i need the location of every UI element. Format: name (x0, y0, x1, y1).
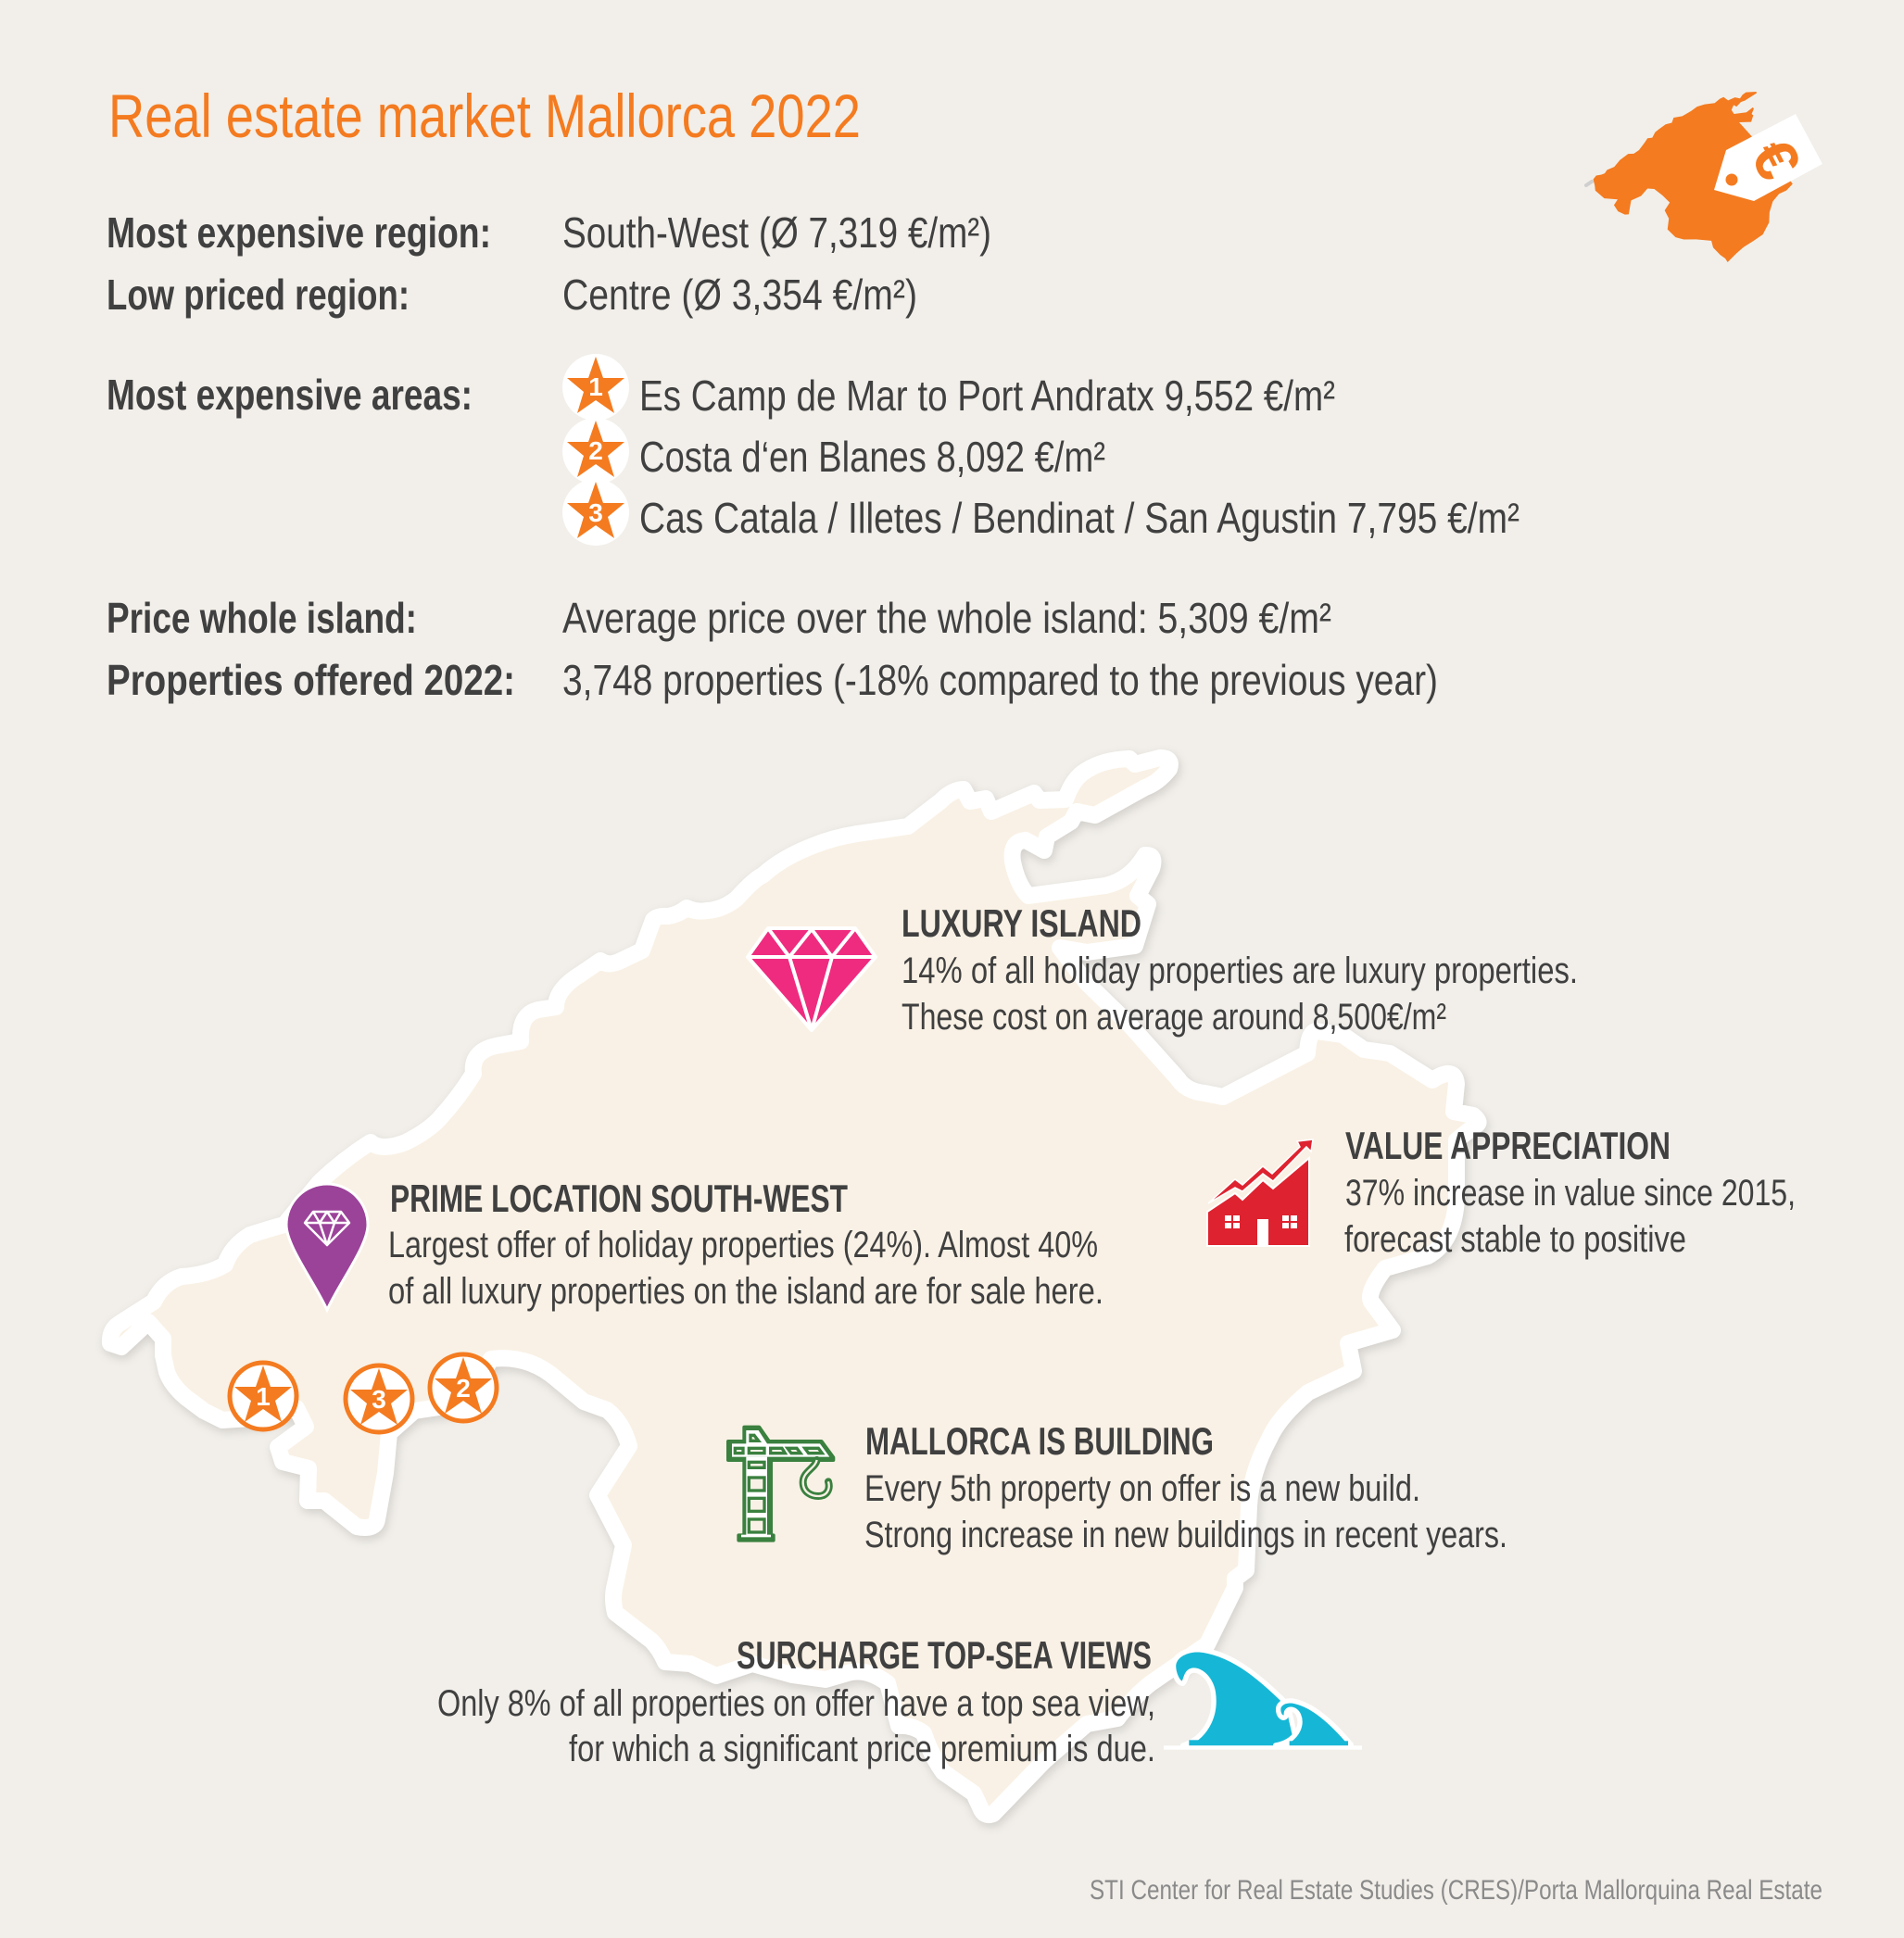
ranking badge 3 (562, 479, 629, 546)
block: luxury island (902, 901, 1578, 1038)
label: low priced region: Low priced region: (107, 271, 410, 319)
block: surcharge top-sea views: Only 8% of all properties on offer have a top sea view, (437, 1683, 1155, 1724)
value: properties offered: 3,748 properties (-18% compared to the previous year) (562, 656, 1438, 704)
map marker star 3: 3 (372, 1385, 386, 1414)
block: surcharge top-sea views (437, 1633, 1155, 1769)
block: luxury island: 14% of all holiday properties are luxury properties. (902, 950, 1578, 991)
block: value appreciation (1344, 1124, 1796, 1260)
ranking badge 2: 2 (588, 436, 603, 465)
icon: house with rising arrow (1207, 1139, 1313, 1246)
value: most expensive region: South-West (Ø 7,319 €/m²) (562, 208, 991, 257)
island map outline (110, 758, 1479, 1815)
icon: pink diamond (748, 928, 876, 1030)
label: most expensive region: Most expensive region: (107, 208, 491, 257)
icon: Mallorca map with price tag (1586, 92, 1822, 262)
block: mallorca is building (864, 1419, 1507, 1555)
map marker star 2: 2 (456, 1374, 471, 1403)
block: surcharge top-sea views: SURCHARGE TOP-SEA VIEWS (737, 1633, 1152, 1677)
icon: Mallorca map with price tag: € (1738, 129, 1814, 190)
value: low priced region: Centre (Ø 3,354 €/m²) (562, 271, 917, 319)
map marker star 3 (346, 1365, 412, 1432)
map marker star 1: 1 (256, 1382, 271, 1411)
block: value appreciation: VALUE APPRECIATION (1345, 1124, 1671, 1167)
map marker star 1 (230, 1363, 296, 1429)
block: prime location south-west: PRIME LOCATION SOUTH-WEST (390, 1177, 848, 1220)
block: luxury island: LUXURY ISLAND (902, 901, 1141, 945)
ranking badge 2 (562, 418, 629, 484)
block: mallorca is building: Strong increase in new buildings in recent years. (864, 1515, 1507, 1555)
block: prime location south-west: of all luxury properties on the island are for sale here. (388, 1271, 1103, 1312)
block: value appreciation: forecast stable to positive (1344, 1219, 1686, 1260)
area 3: Cas Catala / Illetes / Bendinat / San Agustin 7,795 €/m² (639, 494, 1519, 542)
value: price whole island: Average price over the whole island: 5,309 €/m² (562, 594, 1331, 642)
area 1: Es Camp de Mar to Port Andratx 9,552 €/m² (639, 371, 1335, 420)
block: value appreciation: 37% increase in value since 2015, (1345, 1173, 1796, 1214)
ranking badge 3: 3 (588, 498, 603, 527)
block: prime location south-west: Largest offer of holiday properties (24%). Almost 40% (388, 1225, 1098, 1265)
ranking badge 1: 1 (588, 372, 603, 401)
block: luxury island: These cost on average around 8,500€/m² (902, 997, 1446, 1038)
icon: green crane (728, 1428, 833, 1541)
area 2: Costa d‘en Blanes 8,092 €/m² (639, 433, 1105, 481)
block: mallorca is building: MALLORCA IS BUILDING (865, 1419, 1214, 1463)
icon: purple location pin (286, 1184, 368, 1310)
block: surcharge top-sea views: for which a significant price premium is due. (569, 1729, 1155, 1769)
block: prime location south-west (388, 1177, 1103, 1312)
title: Real estate market Mallorca 2022 (108, 82, 861, 150)
label: properties offered: Properties offered 2022: (107, 656, 515, 704)
label: price whole island: Price whole island: (107, 594, 417, 642)
icon: blue wave (1164, 1650, 1362, 1750)
label: most expensive areas: Most expensive areas: (107, 371, 473, 419)
block: mallorca is building: Every 5th property on offer is a new build. (864, 1468, 1420, 1509)
map marker star 2 (430, 1354, 497, 1421)
ranking badge 1 (562, 354, 629, 421)
